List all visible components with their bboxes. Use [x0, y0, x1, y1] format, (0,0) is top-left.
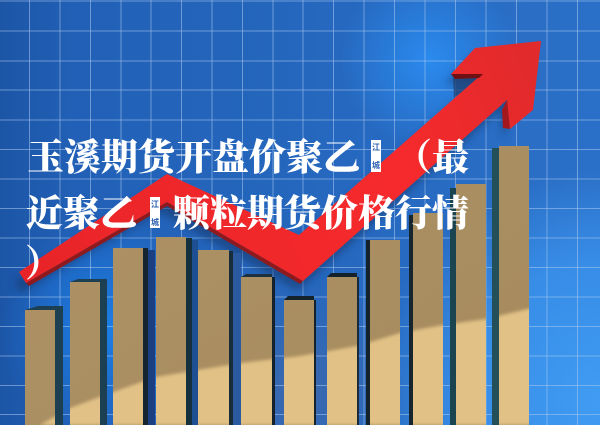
placeholder glyph box, line 1: 江: [372, 142, 380, 152]
placeholder glyph box, line 1: 城: [372, 160, 380, 170]
arrow head barb shadows: [453, 78, 480, 98]
arrow shadow: [14, 51, 533, 293]
arrow underside edge: [26, 202, 303, 286]
title: line 3 closing bracket: ）: [25, 244, 62, 285]
arrow upper barb side: [451, 74, 483, 79]
title: line 1: 玉溪期货开盘价聚乙: [27, 137, 360, 179]
arrow body: [19, 41, 541, 283]
title: line 1: （最: [395, 137, 469, 179]
red arrow rising to the upper right: [19, 41, 541, 286]
arrow lower barb side: [502, 100, 510, 129]
placeholder glyph box, line 2: [150, 197, 160, 228]
placeholder glyph box, line 1: [371, 140, 381, 172]
title: line 2: 颗粒期货价格行情: [173, 193, 469, 235]
title: line 2: 近聚乙: [26, 193, 137, 235]
bar chart: twelve tan 3D bars: [25, 146, 529, 425]
placeholder glyph box, line 2: 城: [151, 217, 159, 227]
placeholder glyph box, line 2: 江: [151, 199, 159, 209]
bar front faces: [25, 146, 529, 425]
title: line 2: [26, 193, 469, 235]
bar side faces: [25, 148, 499, 425]
